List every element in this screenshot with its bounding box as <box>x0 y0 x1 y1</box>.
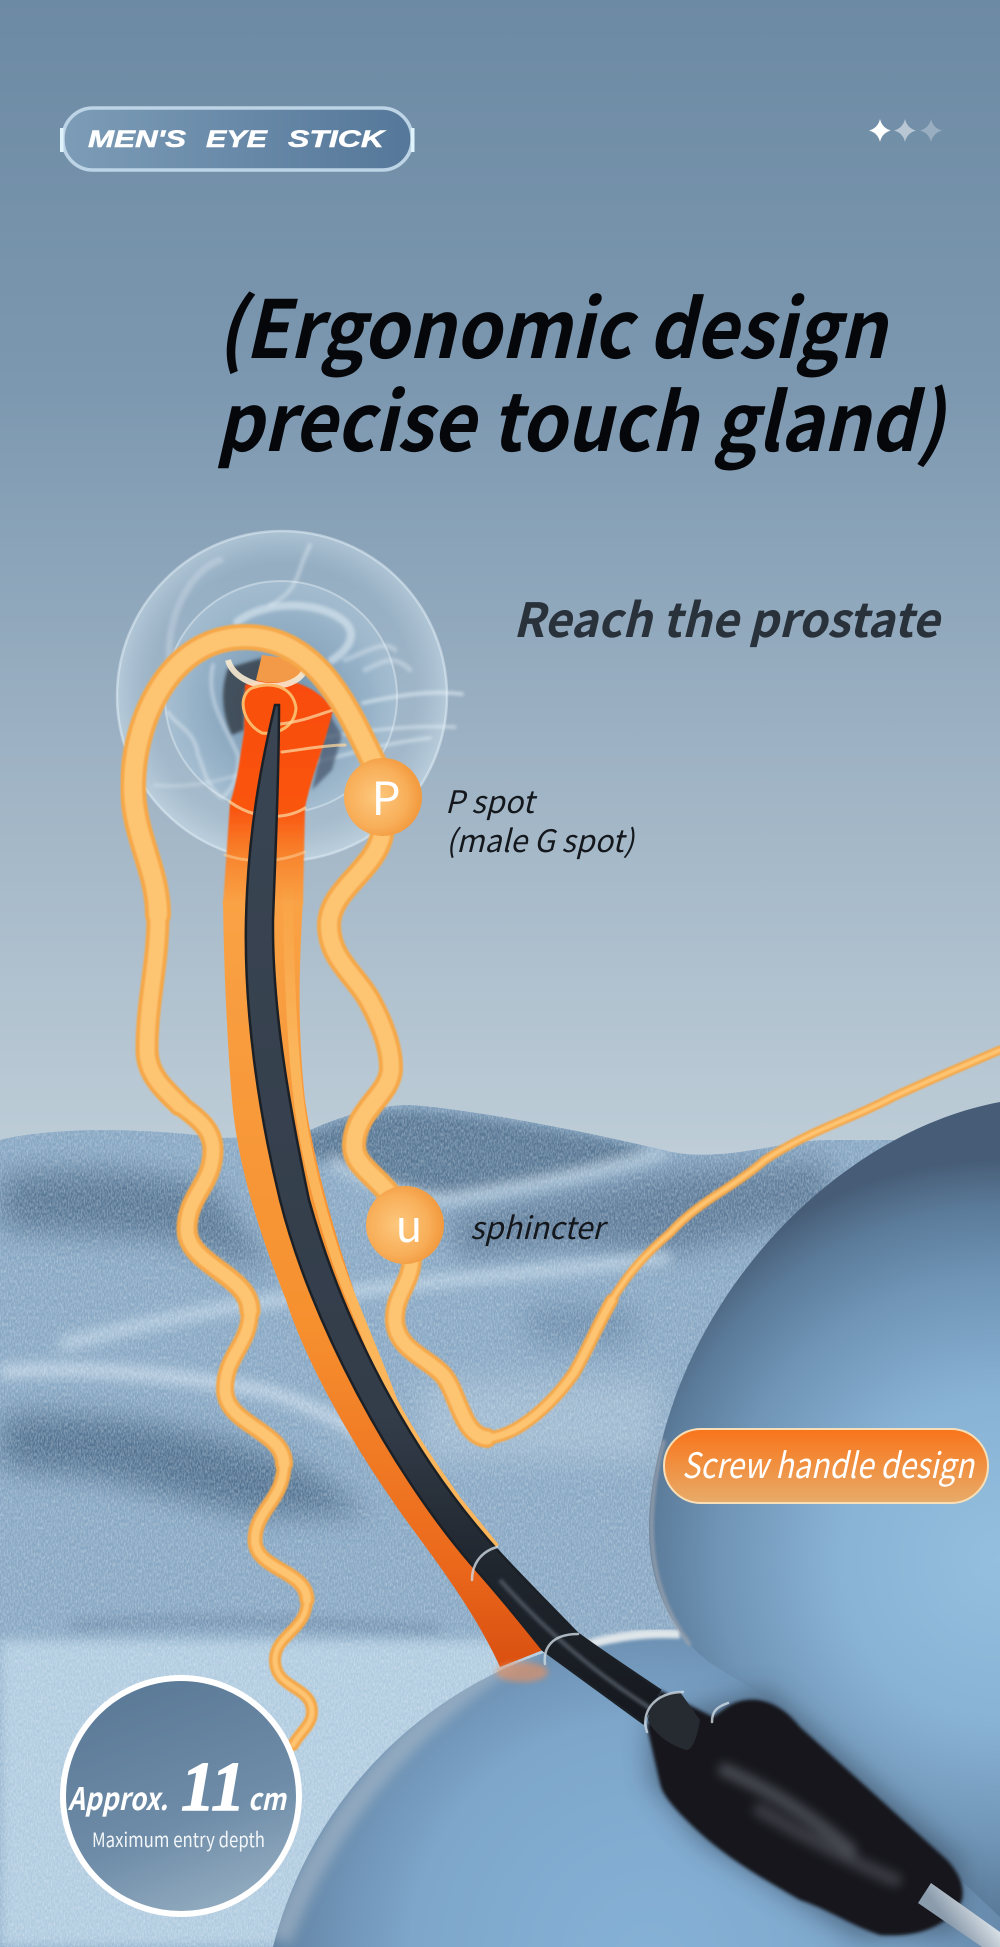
title <box>216 266 947 475</box>
handle soft shadow <box>650 1690 960 1940</box>
handle highlights <box>725 1770 895 1880</box>
callout: approx 11 cm maximum entry depth: Approx. <box>67 1774 168 1819</box>
dark cavity right of the gland <box>312 712 342 790</box>
title: (Ergonomic design <box>217 266 890 382</box>
marker: P ball <box>344 758 422 836</box>
orange wavy path: right tube through P spot and sphincter <box>329 835 1000 1438</box>
marker: P ball: P <box>371 763 401 829</box>
decorative sphere: right dome <box>649 1102 1000 1917</box>
tag: screw handle design <box>664 1429 988 1503</box>
orange glow where the band meets the dome <box>496 1662 548 1682</box>
metal tail of the handle <box>918 1883 1000 1947</box>
callout: approx 11 cm maximum entry depth: Maximum entry depth <box>92 1824 265 1853</box>
label: P spot: (male G spot) <box>446 816 635 861</box>
anatomy bubble: translucent prostate cross-section <box>117 531 462 905</box>
sleeve on the handle neck <box>648 1692 700 1750</box>
white crescent <box>228 660 304 686</box>
rings on the cable <box>472 1547 728 1732</box>
callout: approx 11 cm maximum entry depth <box>63 1678 299 1914</box>
marker: u ball <box>366 1186 444 1264</box>
label: sphincter: sphincter <box>470 1203 609 1248</box>
heading: reach the prostate: Reach the prostate <box>513 582 943 651</box>
background: furry blue hills <box>0 1105 895 1947</box>
black stick <box>246 705 660 1723</box>
prostate outline <box>243 685 296 733</box>
label: P spot <box>445 777 635 861</box>
callout: approx 11 cm maximum entry depth: 11 <box>181 1749 245 1826</box>
handle body <box>647 1690 963 1935</box>
orange wavy path: left tube to approx 11 cm <box>133 637 375 1745</box>
red hot glow and orange tube below the gland <box>223 679 333 905</box>
title: precise touch gland) <box>216 359 947 475</box>
label: P spot: P spot <box>445 777 537 822</box>
callout: approx 11 cm maximum entry depth: cm <box>248 1775 288 1819</box>
pale orange sliver right of the stick <box>288 880 495 1548</box>
badge: men's eye stick: MEN'S <box>88 126 186 153</box>
badge: men's eye stick: STICK <box>288 126 386 153</box>
orange segment above the prostate <box>256 655 302 683</box>
orange depth band behind the stick <box>223 900 543 1667</box>
marker: u ball: u <box>396 1191 422 1255</box>
badge: men's eye stick <box>60 108 414 170</box>
dark cavity left of the gland <box>223 658 262 735</box>
decorative sphere: lower dome <box>273 1630 1000 1947</box>
icon: three sparkles <box>869 119 942 142</box>
cable highlight <box>500 1580 650 1708</box>
badge: men's eye stick: EYE <box>206 126 268 153</box>
